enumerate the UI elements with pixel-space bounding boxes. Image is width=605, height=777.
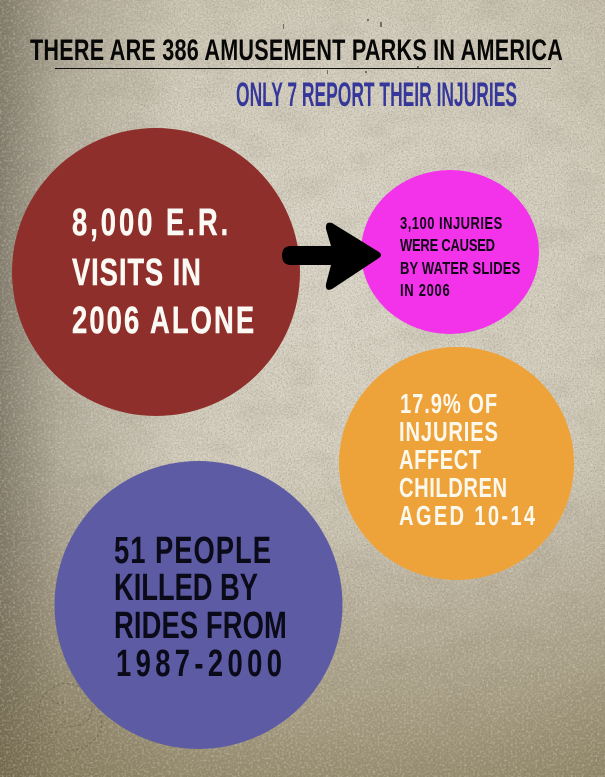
text: E.R. visits: [72, 202, 254, 342]
text: children statistic: INJURIES: [399, 417, 498, 448]
icon: faint doodle in paper corner: [22, 684, 102, 756]
text: E.R. visits: 8,000 E.R.: [72, 202, 228, 244]
text: water slide injuries: [400, 214, 520, 301]
text: deaths: 1987-2000: [116, 643, 282, 685]
text: children statistic: [399, 389, 535, 532]
panel: magenta circle, water slides: [361, 170, 539, 334]
text: children statistic: AGED 10-14: [399, 501, 535, 532]
text: children statistic: 17.9% OF: [400, 389, 497, 420]
text: children statistic: AFFECT: [399, 445, 481, 476]
text: water slide injuries: WERE CAUSED: [400, 236, 495, 256]
text: E.R. visits: 2006 ALONE: [72, 300, 254, 342]
panel: purple circle, deaths: [54, 461, 342, 749]
panel: red circle, E.R. visits: [12, 128, 300, 416]
title: THERE ARE 386 AMUSEMENT PARKS IN AMERICA: [30, 32, 563, 67]
text: children statistic: CHILDREN: [399, 473, 507, 504]
text: deaths: 51 PEOPLE: [114, 530, 271, 572]
text: water slide injuries: 3,100 INJURIES: [400, 214, 502, 234]
title underline: [55, 68, 551, 69]
text: deaths: [114, 530, 287, 685]
panel: orange circle, children: [339, 347, 574, 580]
text: water slide injuries: IN 2006: [400, 281, 450, 301]
text: deaths: KILLED BY: [114, 567, 258, 609]
text: water slide injuries: BY WATER SLIDES: [400, 259, 520, 279]
text: E.R. visits: VISITS IN: [72, 252, 201, 294]
text: deaths: RIDES FROM: [114, 605, 287, 647]
arrow: [282, 223, 381, 290]
